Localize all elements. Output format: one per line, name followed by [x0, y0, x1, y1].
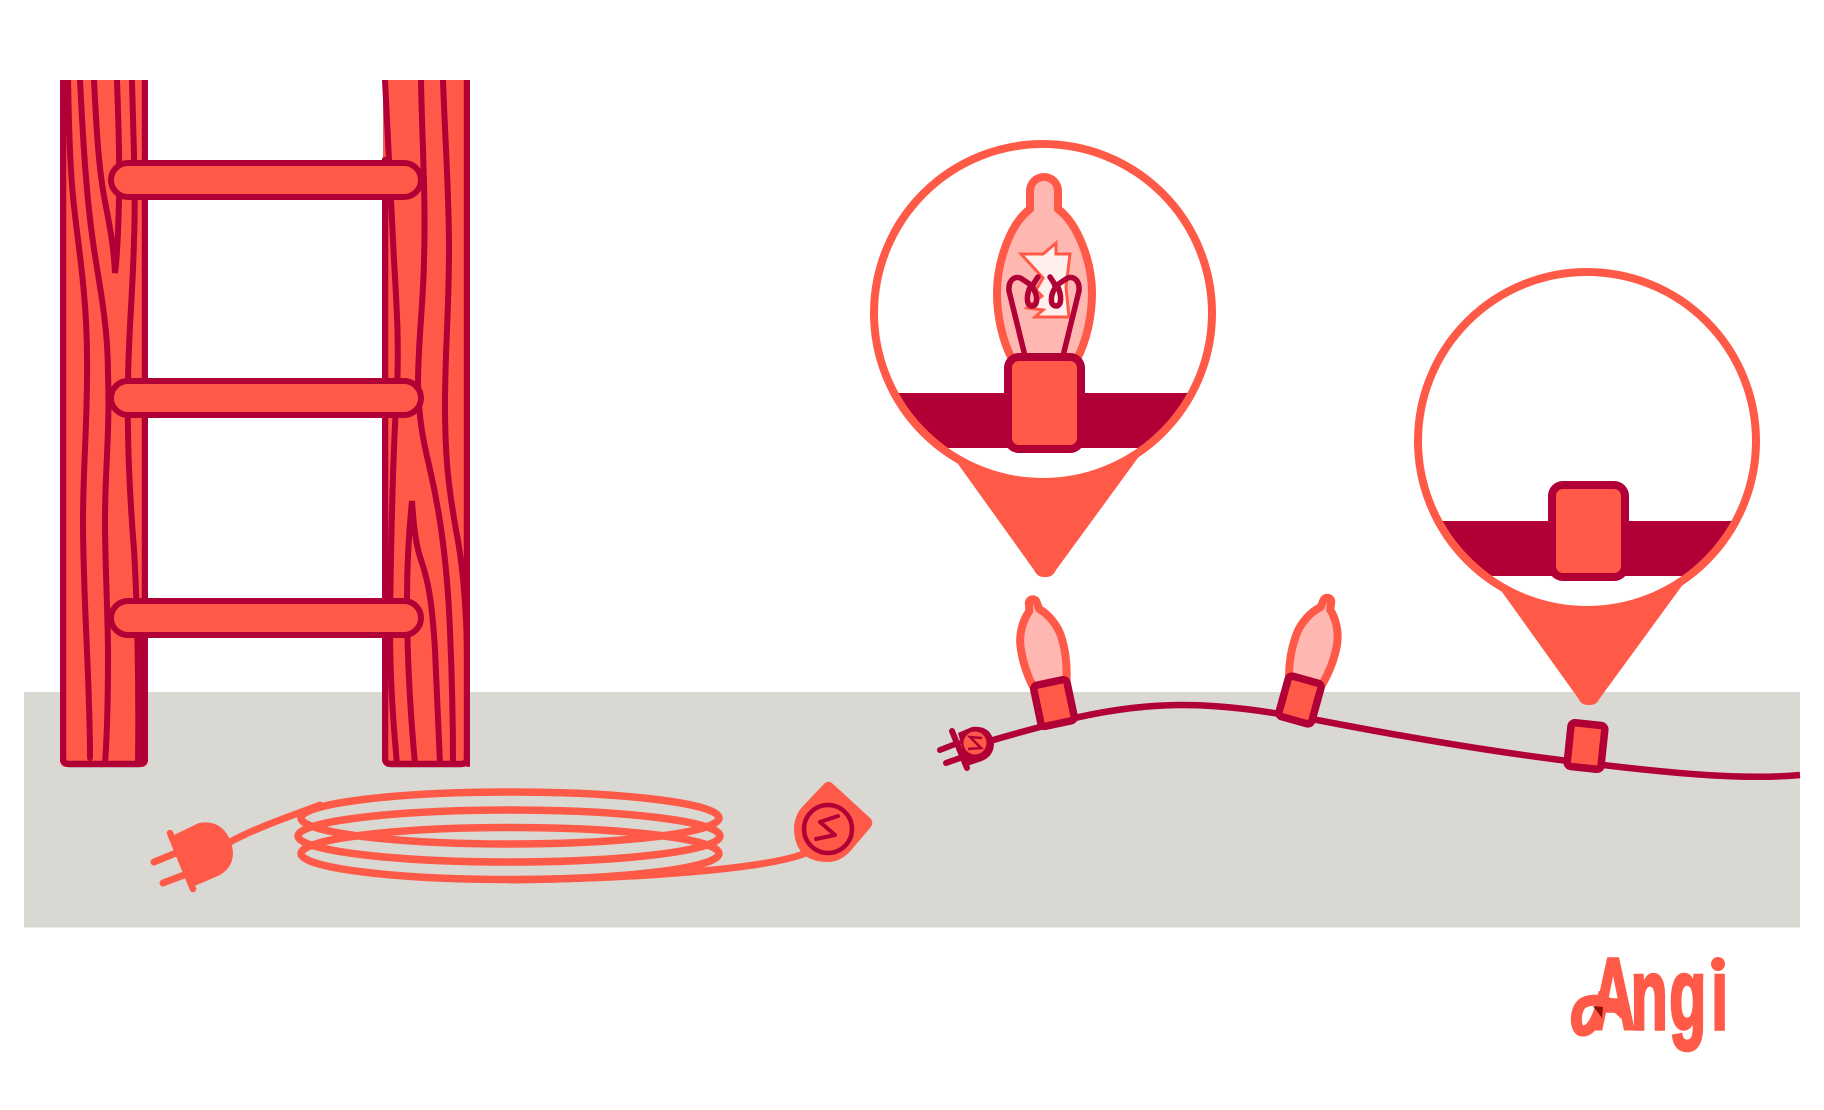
empty socket on string	[1567, 722, 1605, 770]
rung: middle	[111, 381, 421, 415]
logo loop	[1576, 992, 1625, 1031]
rung: top	[111, 163, 421, 197]
icon: socket	[794, 782, 872, 862]
empty socket	[1552, 485, 1625, 577]
callout circle	[1418, 272, 1756, 610]
cord tail to socket	[510, 852, 808, 880]
logo dot	[1711, 957, 1725, 971]
circle outline	[1418, 272, 1756, 610]
circle outline	[874, 144, 1212, 482]
callout: missing bulb	[1404, 272, 1774, 705]
coiled extension cord	[154, 782, 872, 889]
icon: small plug	[940, 727, 994, 768]
logo dot cover	[1706, 950, 1730, 971]
cord tail to plug	[230, 805, 320, 842]
callout circle	[874, 144, 1212, 482]
light string cord	[990, 705, 1800, 777]
floor	[24, 692, 1800, 928]
logo wordmark: Angi	[1591, 938, 1728, 1051]
logo	[1576, 938, 1730, 1051]
large bulb glass	[997, 177, 1092, 359]
left rail	[60, 80, 148, 767]
dark wire band	[898, 393, 1188, 448]
broken filament star	[1021, 243, 1070, 317]
light bulb 2	[1274, 592, 1349, 726]
bulb socket	[1008, 357, 1081, 449]
rung: bottom	[111, 601, 421, 635]
dark wire band	[1442, 521, 1732, 576]
icon: plug	[154, 822, 233, 889]
filament wires	[1009, 277, 1079, 356]
cord coils	[298, 792, 720, 880]
callout pointer	[948, 450, 1140, 577]
light bulb 1	[1011, 595, 1079, 728]
ladder	[60, 80, 470, 767]
callout pointer	[1492, 578, 1684, 705]
right rail	[383, 80, 470, 767]
callout: broken bulb	[860, 144, 1230, 577]
logo wedge	[1593, 1006, 1603, 1018]
